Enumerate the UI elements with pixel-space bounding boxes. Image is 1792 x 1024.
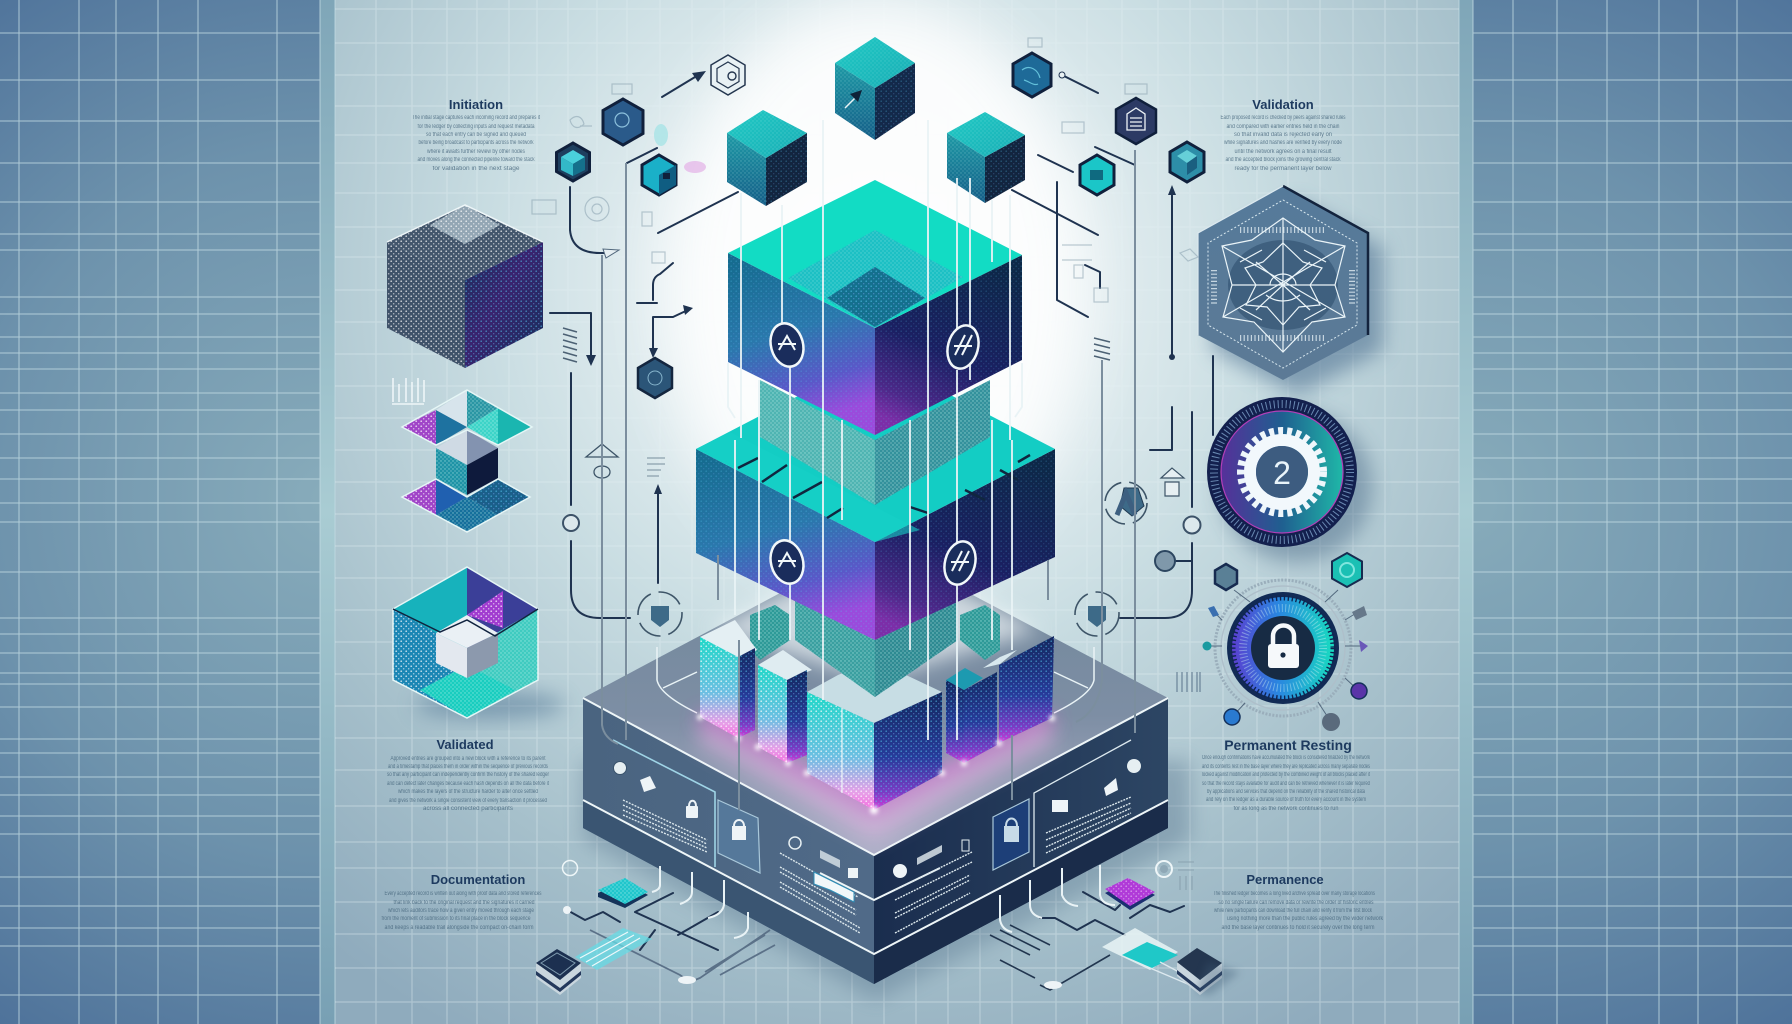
text block: Documentation description: Every accepted record is written out along with proof data and stored references bbox=[384, 891, 542, 897]
data strip bbox=[1102, 928, 1178, 970]
vertical connector lines through the stack bbox=[602, 90, 1135, 810]
stacked card bbox=[1177, 948, 1222, 995]
lower block left face bbox=[696, 449, 875, 640]
text block: Permanent Resting description: and rely on the ledger as a durable source of truth for every account in the system bbox=[1206, 797, 1366, 803]
heading: Validation: Validation bbox=[1252, 97, 1314, 112]
text block: Validated description: which makes the layers of the structure harder to alter once settled bbox=[397, 789, 538, 795]
background: central panel bbox=[320, 0, 1473, 1024]
platform top face bbox=[583, 543, 1168, 855]
small stipple cubes behind columns bbox=[750, 605, 1000, 660]
text block: Initiation description: for the ledger by collecting inputs and request metadata bbox=[418, 124, 535, 130]
text block: Validated description: so that any participant can independently confirm the history of the shared ledger bbox=[387, 772, 549, 778]
icon: large network hexagon bbox=[1198, 186, 1383, 395]
small ghost icons left bbox=[532, 84, 665, 263]
platform right wall bbox=[874, 698, 1168, 984]
text block: Initiation description: before being broadcast to participants across the network bbox=[418, 140, 534, 146]
text block: Documentation description bbox=[382, 891, 542, 931]
text block: Documentation description: and keeps a readable trail alongside the compact on-chain form bbox=[384, 925, 534, 931]
left wall centre card bbox=[780, 837, 860, 933]
text block: Validated description bbox=[387, 756, 549, 812]
lock badge lower right bbox=[940, 538, 980, 588]
text block: Permanent Resting description: locked against modification and protected by the combined weight of all blocks placed after it bbox=[1202, 772, 1370, 778]
text block: Validation description: ready for the permanent layer below bbox=[1234, 166, 1332, 172]
text block: Documentation description: which lets auditors trace how a given entry moved through each stage bbox=[387, 908, 535, 914]
heading: Permanence: Permanence bbox=[1246, 872, 1324, 887]
heading: Validated: Validated bbox=[436, 737, 494, 752]
text block: Initiation description: where it awaits further review by other nodes bbox=[426, 149, 525, 155]
connector lines right bbox=[1012, 72, 1213, 618]
lock badge upper right bbox=[943, 322, 983, 372]
text block: Initiation description: and moves along the connected pipeline toward the stack bbox=[418, 157, 535, 163]
text block: Permanence description: The finished ledger becomes a long lived archive spread over many storage locations bbox=[1213, 891, 1375, 897]
upper block top face bbox=[728, 180, 1022, 328]
base column A bbox=[700, 620, 757, 738]
upper block bbox=[728, 180, 1022, 435]
left wall info card bbox=[613, 740, 715, 867]
text block: Initiation description bbox=[412, 115, 540, 172]
text block: Permanent Resting description: Once enough confirmations have accumulated the block is considered finalized by the network bbox=[1202, 755, 1371, 761]
right wall lock tile bbox=[993, 799, 1029, 870]
top right cube bbox=[947, 112, 1025, 203]
text block: Validated description: and can detect later changes because each hash depends on all the data before it bbox=[387, 781, 549, 787]
icon: perforated cube bbox=[387, 205, 543, 368]
top centre cube bbox=[835, 37, 915, 140]
lower block top face bbox=[696, 356, 1055, 542]
teal chip bbox=[598, 878, 648, 908]
circuit diagram bottom right bbox=[990, 861, 1240, 995]
background: right side panel bbox=[1473, 0, 1792, 1024]
stacked card bbox=[536, 949, 581, 995]
text block: Permanent Resting description: and its contents rest in the base layer where they are replicated across many separate nodes bbox=[1202, 764, 1370, 770]
heading: Initiation: Initiation bbox=[449, 97, 503, 112]
text block: Documentation description: from the moment of submission to its final place in the block sequence bbox=[382, 916, 531, 922]
lower block bbox=[696, 356, 1055, 640]
heading: Permanent Resting: Permanent Resting bbox=[1224, 737, 1352, 753]
right wall centre card bbox=[893, 840, 972, 933]
text block: Validated description: and gives the network a single consistent view of every transaction it processed bbox=[389, 798, 547, 804]
text block: Permanent Resting description bbox=[1202, 755, 1371, 812]
lower stipple core bbox=[795, 600, 958, 697]
connector lines left bbox=[550, 71, 738, 618]
text block: Validated description: across all connected participants bbox=[423, 806, 513, 812]
icon: gear dial with number 2: 2 bbox=[1273, 455, 1291, 491]
icon: circuit hexagon left bbox=[638, 358, 672, 398]
base column C bbox=[946, 668, 997, 763]
lock badge lower left bbox=[766, 537, 808, 587]
base column front bbox=[807, 692, 942, 810]
base column B bbox=[758, 650, 812, 763]
background: left side panel bbox=[0, 0, 320, 1024]
icon: padlock security dial bbox=[1177, 553, 1368, 731]
icon: pink oval bbox=[684, 161, 706, 173]
front column top bbox=[807, 660, 942, 723]
circuit diagram bottom left bbox=[536, 860, 775, 995]
right wall info card bbox=[1034, 740, 1141, 867]
text block: Validation description bbox=[1220, 115, 1346, 172]
text block: Validation description: while signatures and hashes are verified by every node bbox=[1223, 140, 1343, 146]
heading: Documentation: Documentation bbox=[431, 872, 525, 887]
text block: Permanence description: so no single failure can remove data or rewrite the order of historic entries bbox=[1218, 900, 1374, 906]
text block: Initiation description: for validation in the next stage bbox=[432, 166, 520, 172]
text block: Validation description: and compared with earlier entries held in the chain bbox=[1226, 124, 1340, 130]
icon: faceted hexagon with white cube bbox=[393, 567, 565, 719]
left wall lock tile bbox=[718, 800, 760, 873]
text block: Permanent Resting description: so that the record stays available for audit and can be retrieved whenever it is later required bbox=[1202, 781, 1370, 787]
text block: Permanence description: using nothing more than the public rules agreed by the wider network bbox=[1227, 916, 1384, 922]
text block: Permanent Resting description: for as long as the network continues to run bbox=[1234, 806, 1338, 812]
text block: Documentation description: that link back to the original request and the signatures it carried bbox=[394, 900, 534, 906]
top right hexagon icons bbox=[1013, 53, 1204, 195]
text block: Permanent Resting description: by applications and services that depend on the reliability of the shared historical data bbox=[1207, 789, 1365, 795]
icon: gear dial with number 2 bbox=[1207, 397, 1372, 562]
platform left wall bbox=[583, 698, 874, 984]
text block: Validation description: until the network agrees on a final result bbox=[1234, 149, 1332, 155]
purple chip bbox=[1105, 878, 1155, 910]
text block: Validated description: and a timestamp that places them in order within the sequence of previous records bbox=[388, 764, 548, 770]
icon: cyan ring chip bbox=[654, 124, 668, 146]
small ghost icons right bbox=[1028, 38, 1198, 302]
ring nodes at base bbox=[638, 482, 1147, 636]
top left cube bbox=[727, 110, 807, 206]
data strip bbox=[575, 928, 652, 970]
text block: Validation description: and the accepted block joins the growing central stack bbox=[1226, 157, 1341, 163]
icon: barcode mark bbox=[392, 378, 424, 404]
lock badge upper left bbox=[766, 320, 808, 370]
text block: Validated description: Approved entries are grouped into a new block with a reference to its parent bbox=[390, 756, 546, 762]
text block: Permanence description bbox=[1213, 891, 1384, 931]
text block: Validation description: Each proposed record is checked by peers against shared rules bbox=[1220, 115, 1346, 121]
text block: Validation description: so that invalid data is rejected early on bbox=[1234, 132, 1332, 138]
text block: Permanence description: and the base layer continues to hold it securely over the long term bbox=[1222, 925, 1374, 931]
upper block right face bbox=[875, 255, 1022, 435]
text block: Permanence description: while new participants can download the full chain and verify it from the first block bbox=[1213, 908, 1373, 914]
top left hexagon icons bbox=[556, 55, 745, 195]
mid stipple core bbox=[760, 380, 990, 505]
base column D bbox=[983, 636, 1054, 743]
base platform bbox=[583, 543, 1190, 1000]
text block: Initiation description: so that each entry can be signed and queued bbox=[426, 132, 526, 138]
lower block right face bbox=[875, 449, 1055, 640]
text block: Initiation description: The initial stage captures each incoming record and prepares it bbox=[412, 115, 540, 121]
upper block left face bbox=[728, 253, 875, 435]
glow sparks at column feet bbox=[697, 714, 1055, 814]
icon: split hexagon prism bbox=[402, 390, 532, 532]
